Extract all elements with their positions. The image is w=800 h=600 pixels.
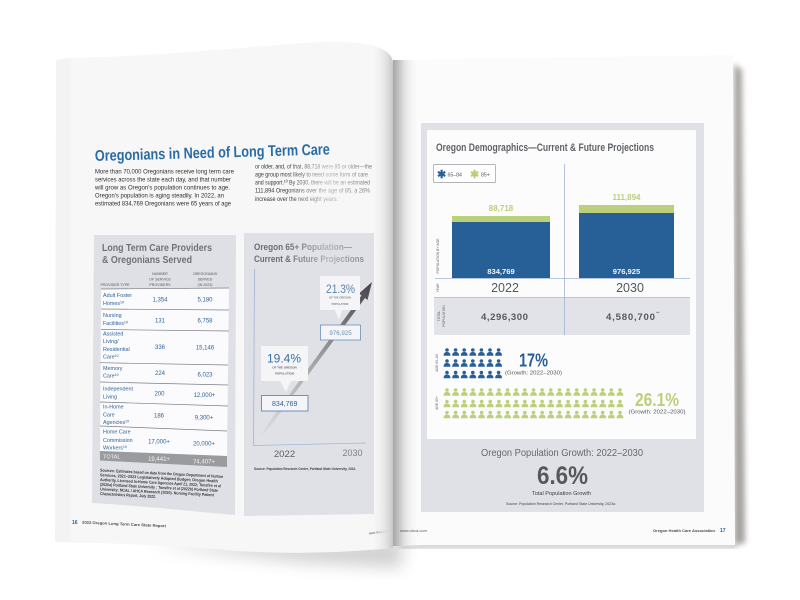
row: Home Care Commission Workers: Home Care	[103, 430, 131, 436]
right page	[392, 55, 735, 546]
source: providers: (2020a) Portland State University ; Tonsfire et al (2022b) Portland State	[100, 482, 219, 493]
stat: 6.6 percent: 6.6%	[537, 462, 588, 490]
panel: providers table	[92, 235, 236, 515]
legend	[434, 164, 496, 182]
total population row: 4,296,300	[481, 312, 528, 323]
row: Home Care Commission Workers: Commission	[103, 438, 133, 444]
total population row: TOTAL	[437, 311, 441, 321]
value box: 976,925: 976,925	[329, 330, 352, 337]
heading: Oregon 65+ population	[254, 241, 364, 264]
legend: ✱	[437, 169, 446, 181]
row: Independent Living	[103, 386, 216, 400]
table header: (IN 2023)	[198, 283, 212, 287]
row: Home Care Commission Workers: 20,000+	[193, 442, 215, 448]
row: Home Care Commission Workers	[103, 430, 215, 452]
footer: right page: www.ohca.com	[400, 529, 427, 533]
callout: 21.3 percent: OF THE OREGON	[329, 296, 351, 300]
total population row: POPULATION	[442, 305, 446, 327]
row: In-Home Care Agencies: Care	[103, 412, 115, 418]
row: Adult Foster Homes: Homes¹⁰	[103, 301, 124, 307]
row: Assisted Living: Living/	[103, 339, 119, 345]
table header: SERVED	[198, 278, 213, 282]
row: Nursing Facilities: 6,758	[197, 318, 213, 324]
row: Adult Foster Homes: 1,354	[152, 298, 168, 304]
gutter shading	[374, 46, 393, 550]
source: providers: Characteristics Report, July 2022.	[100, 491, 156, 499]
heading: demographics: Oregon Demographics—Current & Future Projections	[436, 142, 654, 154]
callout: 19.4 percent	[261, 346, 308, 392]
footer: left page: 2022 Oregon Long Term Care State Report	[82, 520, 167, 528]
row: Assisted Living: Care¹⁰	[103, 354, 119, 360]
body text: column two: or older, and, of that, 88,718 were 85 or older—the	[255, 164, 372, 170]
row: Home Care Commission Workers: 17,000+	[148, 440, 170, 446]
row: Nursing Facilities: Facilities¹⁰	[103, 321, 128, 327]
left page	[55, 42, 393, 553]
body text: column one: services across the state each day, and that number	[95, 176, 232, 184]
bar: 2022	[452, 204, 550, 295]
total population row	[434, 297, 690, 335]
table header: NUMBER	[152, 272, 168, 276]
caption: total population growth: Total Population Growth	[532, 491, 591, 497]
panel: Oregon 65+ population	[244, 233, 374, 516]
stat: 17 percent growth	[505, 350, 562, 376]
source: providers: Authority, Licensed In-Home Care Agencies April 21, 2022; Tonsfire et al	[100, 477, 221, 488]
value box: 834,769	[262, 396, 308, 411]
source: 65+ population: Source: Population Research Center, Portland State University, 2024.	[254, 467, 356, 471]
callout: 19.4 percent: POPULATION	[275, 372, 294, 376]
bar: 2030	[579, 193, 674, 295]
footer: left page	[72, 520, 389, 535]
heading: providers: Long Term Care Providers	[102, 243, 212, 254]
body text: column two: and support.¹⁰ By 2030, there will be an estimated	[255, 180, 370, 186]
footer: right page: Oregon Health Care Association	[653, 528, 716, 533]
source: providers: Services, 2021–2023 Legislatively Adopted Budget; Oregon Health	[100, 472, 218, 483]
axis label: 2030: 2030	[342, 448, 363, 458]
table header: OF SERVICE	[149, 278, 171, 282]
row: In-Home Care Agencies	[103, 404, 214, 426]
heading: providers	[102, 243, 212, 266]
table body	[100, 288, 229, 456]
body text: column one	[94, 168, 234, 208]
row dividers	[100, 288, 229, 431]
row: total: TOTAL	[103, 454, 121, 460]
stat: 26.1 percent growth: 26.1%	[635, 390, 679, 410]
body text: column one: estimated 834,769 Oregonians were 65 years of age	[95, 200, 231, 208]
row: Memory Care: Care¹⁰	[103, 374, 119, 380]
source: providers	[100, 468, 223, 499]
row: total: 74,407+	[193, 460, 215, 466]
stat: 26.1 percent growth: (Growth: 2022–2030)	[628, 410, 686, 416]
growth arrow	[256, 282, 372, 441]
callout: 21.3 percent: POPULATION	[332, 302, 349, 306]
row: Adult Foster Homes: 5,180	[197, 298, 213, 304]
bar: 2030: 111,894	[612, 193, 641, 202]
row: Adult Foster Homes: Adult Foster	[103, 293, 132, 299]
callout: 21.3 percent: 21.3%	[326, 284, 355, 296]
axis label: 2022: 2022	[274, 449, 295, 460]
source: providers: University; NCAL / AHCA Research (2020). Nursing Facility Patient	[100, 486, 215, 497]
row: total	[100, 451, 227, 467]
source: demographics: Source: Population Research Center, Portland State University, 2023a.	[506, 502, 616, 506]
pictogram: age 65-84	[435, 348, 502, 378]
legend: ✱	[470, 169, 479, 181]
row: In-Home Care Agencies: Agencies¹⁰	[103, 420, 129, 426]
body text: column one: will grow as Oregon's population continues to age.	[94, 184, 230, 192]
drop shadows	[150, 64, 745, 568]
row: Assisted Living: 336	[155, 345, 166, 351]
heading: population growth: Oregon Population Growth: 2022–2030	[481, 448, 643, 459]
source: providers: Sources: Estimates based on data from the Oregon Department of Human	[100, 468, 223, 479]
heading: Oregon 65+ population: Current & Future Projections	[254, 253, 364, 264]
heading: Oregon 65+ population: Oregon 65+ Population—	[254, 241, 353, 252]
row: Nursing Facilities	[103, 313, 213, 327]
body text: column one: Oregon's population is aging steadily. In 2022, an	[95, 192, 224, 200]
panel: demographics background	[421, 123, 704, 512]
table header	[100, 272, 218, 287]
panel: demographics white card	[427, 130, 696, 439]
row: Independent Living: Independent	[103, 386, 133, 392]
table header: PROVIDERS	[149, 283, 171, 287]
row: Memory Care: Memory	[103, 366, 123, 372]
legend: 65–84	[448, 172, 462, 178]
total population row: 4,580,700	[606, 312, 655, 323]
total population row: **	[656, 310, 660, 316]
stat: 17 percent growth: (Growth: 2022–2030)	[505, 370, 562, 376]
legend: 85+	[481, 172, 490, 178]
row: Nursing Facilities: 131	[155, 318, 166, 324]
body text: column two: age group most likely to need some form of care	[255, 172, 368, 178]
body text: column two: increase over the next eight years.	[255, 196, 338, 203]
body text: column two: 111,894 Oregonians over the age of 85, a 26%	[255, 188, 370, 194]
footer: left page: www.ohca.com	[369, 529, 389, 535]
callout: 19.4 percent: 19.4%	[267, 352, 301, 366]
row: Memory Care: 224	[155, 371, 166, 377]
table header: PROVIDER TYPE	[100, 283, 130, 287]
heading: Oregonians in Need of Long Term Care: Oregonians in Need of Long Term Care	[95, 141, 330, 165]
row: In-Home Care Agencies: 186	[154, 414, 165, 420]
stacked bar chart	[436, 193, 674, 295]
row: Assisted Living: 15,146	[196, 346, 215, 352]
footer: right page	[400, 528, 726, 534]
row: Home Care Commission Workers: Workers¹⁰	[103, 446, 127, 452]
row: Independent Living: Living	[103, 394, 117, 400]
bar: 2022: 834,769	[487, 267, 515, 276]
value box: 976,925	[320, 325, 360, 340]
footer: right page: 17	[720, 528, 726, 534]
body text: column two	[255, 164, 372, 203]
bar: 2022: 2022	[491, 281, 519, 295]
row: Adult Foster Homes	[103, 293, 213, 307]
row: In-Home Care Agencies: In-Home	[103, 404, 124, 410]
stat: 17 percent growth: 17%	[519, 350, 548, 370]
axis label: year: YEAR	[436, 283, 440, 293]
row: Assisted Living	[103, 332, 215, 360]
body text: column one: More than 70,000 Oregonians receive long term care	[95, 168, 234, 176]
heading: providers: & Oregonians Served	[102, 255, 192, 266]
stat: 26.1 percent growth	[628, 390, 686, 416]
pictogram: age 85+	[435, 388, 623, 418]
row: total: 19,441+	[148, 457, 170, 463]
bar: 2022: 88,718	[489, 204, 514, 213]
chart axes	[254, 269, 366, 446]
bar: 2030: 2030	[616, 281, 644, 295]
row: Assisted Living: Residential	[103, 347, 130, 353]
callout: 21.3 percent	[320, 276, 360, 320]
pictogram: age 65-84: AGE 65–84	[435, 354, 439, 372]
axis label: population by age: POPULATION BY AGE	[436, 238, 440, 273]
row: Memory Care: 6,023	[197, 372, 213, 378]
row: Memory Care	[103, 366, 213, 380]
row: Assisted Living: Assisted	[103, 332, 123, 338]
row: Independent Living: 200	[154, 392, 165, 398]
callout: 19.4 percent: OF THE OREGON	[272, 366, 297, 370]
table header: OREGONIANS	[193, 272, 218, 276]
divider lines	[435, 164, 690, 335]
bar: 2030: 976,925	[613, 267, 641, 276]
row: Independent Living: 12,000+	[194, 393, 216, 399]
row: In-Home Care Agencies: 9,300+	[195, 416, 214, 422]
footer: left page: 16	[72, 520, 78, 526]
row: Nursing Facilities: Nursing	[103, 313, 122, 319]
pictogram: age 85+: AGE 85+	[435, 396, 439, 410]
value box: 834,769: 834,769	[272, 401, 297, 408]
